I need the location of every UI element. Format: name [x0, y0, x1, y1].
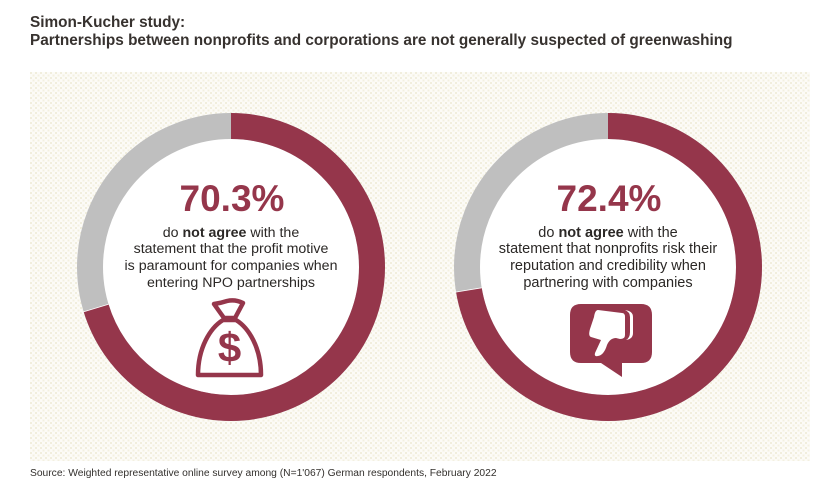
source note: Source: Weighted representative online survey among (N=1'067) German respondents, February 2022	[30, 468, 497, 479]
icon: money bag	[196, 298, 264, 378]
title: Partnerships between nonprofits and corporations are not generally suspected of greenwashing	[30, 32, 733, 49]
donut chart: 70.3%	[77, 113, 385, 421]
title	[30, 14, 733, 49]
panel: textured background	[30, 72, 810, 461]
donut chart: 72.4%	[454, 113, 762, 421]
text: left statement: is paramount for companies when	[125, 258, 337, 274]
text: left statement: do not agree with the	[163, 224, 299, 240]
stat: 72.4%: 72.4%	[557, 178, 661, 219]
stat: 70.3%: 70.3%	[180, 178, 284, 219]
text: left statement	[125, 224, 337, 291]
icon: money bag: $	[218, 324, 241, 371]
text: right statement: do not agree with the	[538, 224, 678, 240]
text: right statement: partnering with companies	[523, 275, 693, 291]
text: left statement: statement that the profit motive	[134, 241, 328, 257]
text: right statement: reputation and credibility when	[510, 258, 706, 274]
text: right statement: statement that nonprofits risk their	[499, 241, 717, 257]
text: left statement: entering NPO partnerships	[147, 275, 315, 291]
title: Simon-Kucher study:	[30, 14, 185, 31]
text: right statement	[499, 224, 717, 291]
icon: thumbs down speech bubble	[570, 304, 652, 377]
